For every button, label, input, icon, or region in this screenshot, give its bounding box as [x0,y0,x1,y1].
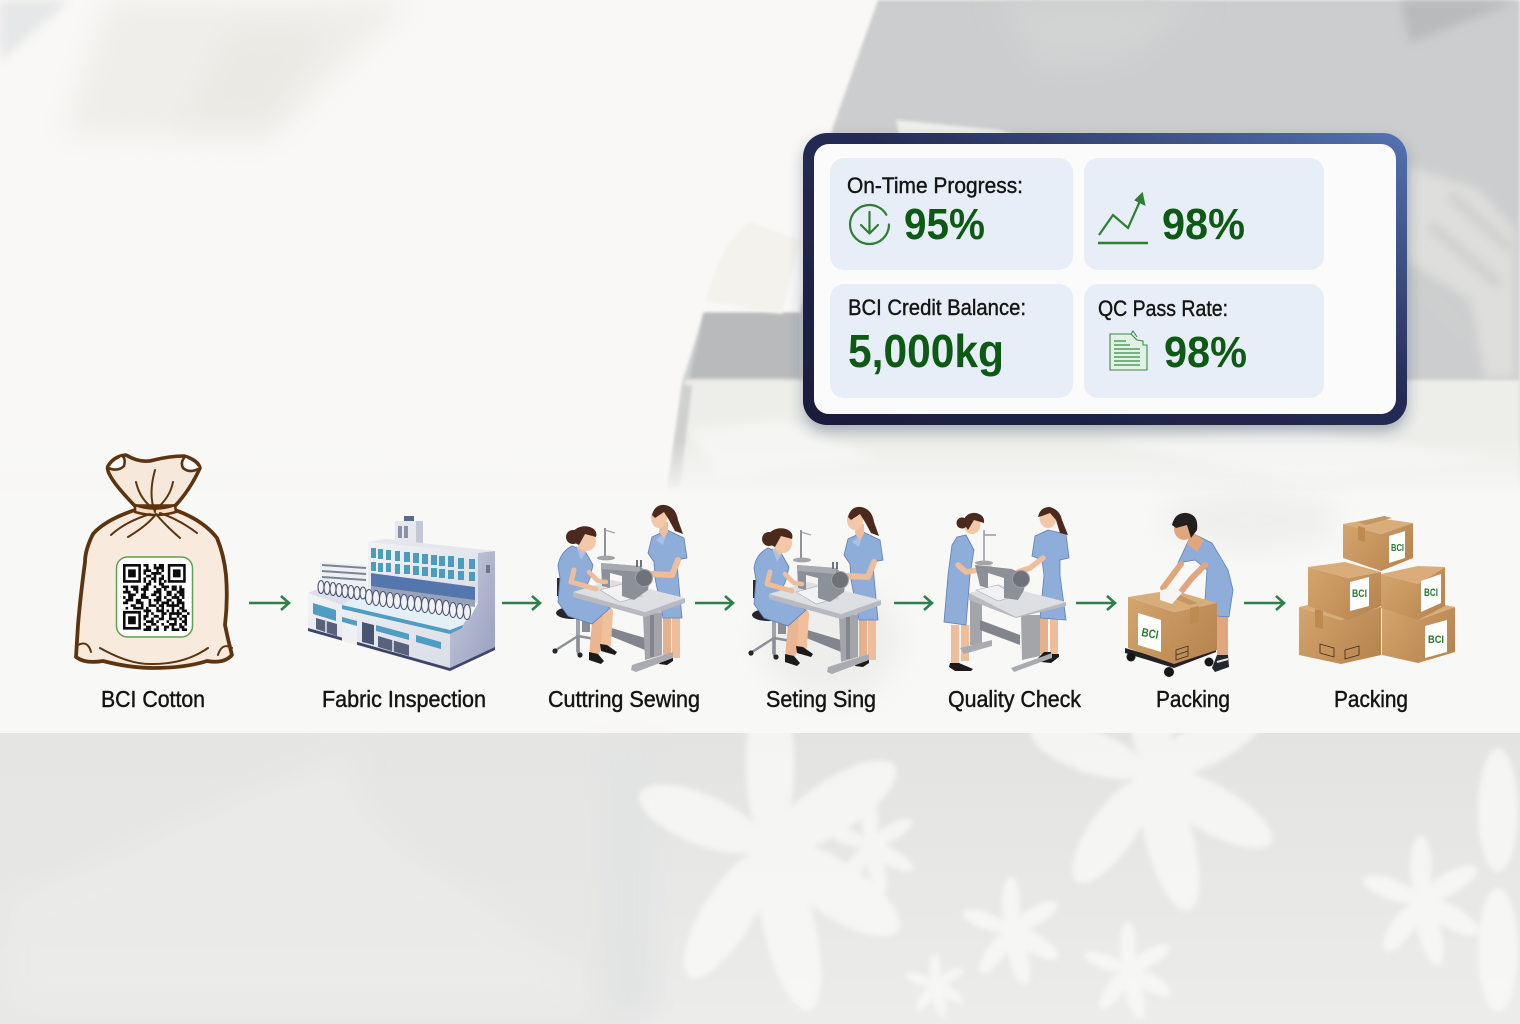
value: 98%: 98% [1162,200,1245,249]
label: Packing: Packing [1156,686,1230,712]
label: Packing: Packing [1334,686,1408,712]
arrow 3 [695,596,733,610]
label: Cuttring Sewing: Cuttring Sewing [548,686,700,712]
icon: two inspectors at machine [944,507,1069,672]
label: Quality Check: Quality Check [948,686,1081,712]
icon: cotton bag [76,455,232,668]
box: middle left [1308,562,1381,620]
icon: down arrow circle [850,205,889,244]
step: packing worker [1125,513,1233,712]
icon: sewing station [552,505,687,672]
step: cutting sewing [548,505,700,712]
arrow 1 [249,596,289,610]
label: QC pass rate: QC Pass Rate: [1098,296,1228,321]
card: QC pass rate [1084,284,1324,398]
value: 98%: 98% [1164,328,1247,377]
icon: QR code label [116,557,192,637]
label: on-time progress: On-Time Progress: [847,173,1023,198]
panel frame [803,133,1407,425]
arrow 4 [894,596,932,610]
icon: rising chart [1098,194,1148,243]
step: seting sing [748,507,883,712]
box: middle right: BCI [1424,587,1438,599]
step: BCI cotton bag [76,455,232,712]
base facade [308,593,450,668]
value: 5,000kg: 5,000kg [848,325,1004,377]
icon: document [1110,331,1147,370]
lace flowers [631,640,1518,1021]
rollers [318,580,470,620]
icon: factory building [308,516,495,671]
panel: KPI dashboard [803,133,1407,425]
value: 95%: 95% [904,200,985,249]
panel inner surface [814,144,1396,414]
upper block [368,542,478,603]
arrow 5 [1076,596,1115,610]
icon: worker taping box on trolley [1125,513,1233,677]
label: BCI credit balance: BCI Credit Balance: [848,295,1026,320]
box: top [1343,516,1413,571]
label: Seting Sing: Seting Sing [766,686,876,712]
box: bottom left [1299,598,1381,664]
box: middle left: BCI [1352,588,1367,600]
card: trend [1084,158,1324,270]
arrow 6 [1244,596,1284,610]
step: quality check [944,507,1081,712]
facade signs and doors [313,603,336,621]
box: top: BCI [1391,543,1404,554]
icon: sewing station [748,507,883,674]
box: bottom right: BCI [1428,634,1444,646]
icon: worker taping box on trolley: BCI [1140,625,1160,642]
card: BCI credit balance [830,284,1073,398]
icon: stack of boxes [1299,516,1455,664]
label: Fabric Inspection: Fabric Inspection [322,686,486,712]
box: bottom right [1382,600,1455,663]
step: packed box stack [1299,516,1455,712]
step: fabric inspection factory [308,516,495,712]
card: on-time progress [830,158,1073,270]
left wing [320,562,367,592]
label: BCI Cotton: BCI Cotton [101,686,205,712]
arrow 2 [502,596,540,610]
box: middle right [1381,566,1445,620]
